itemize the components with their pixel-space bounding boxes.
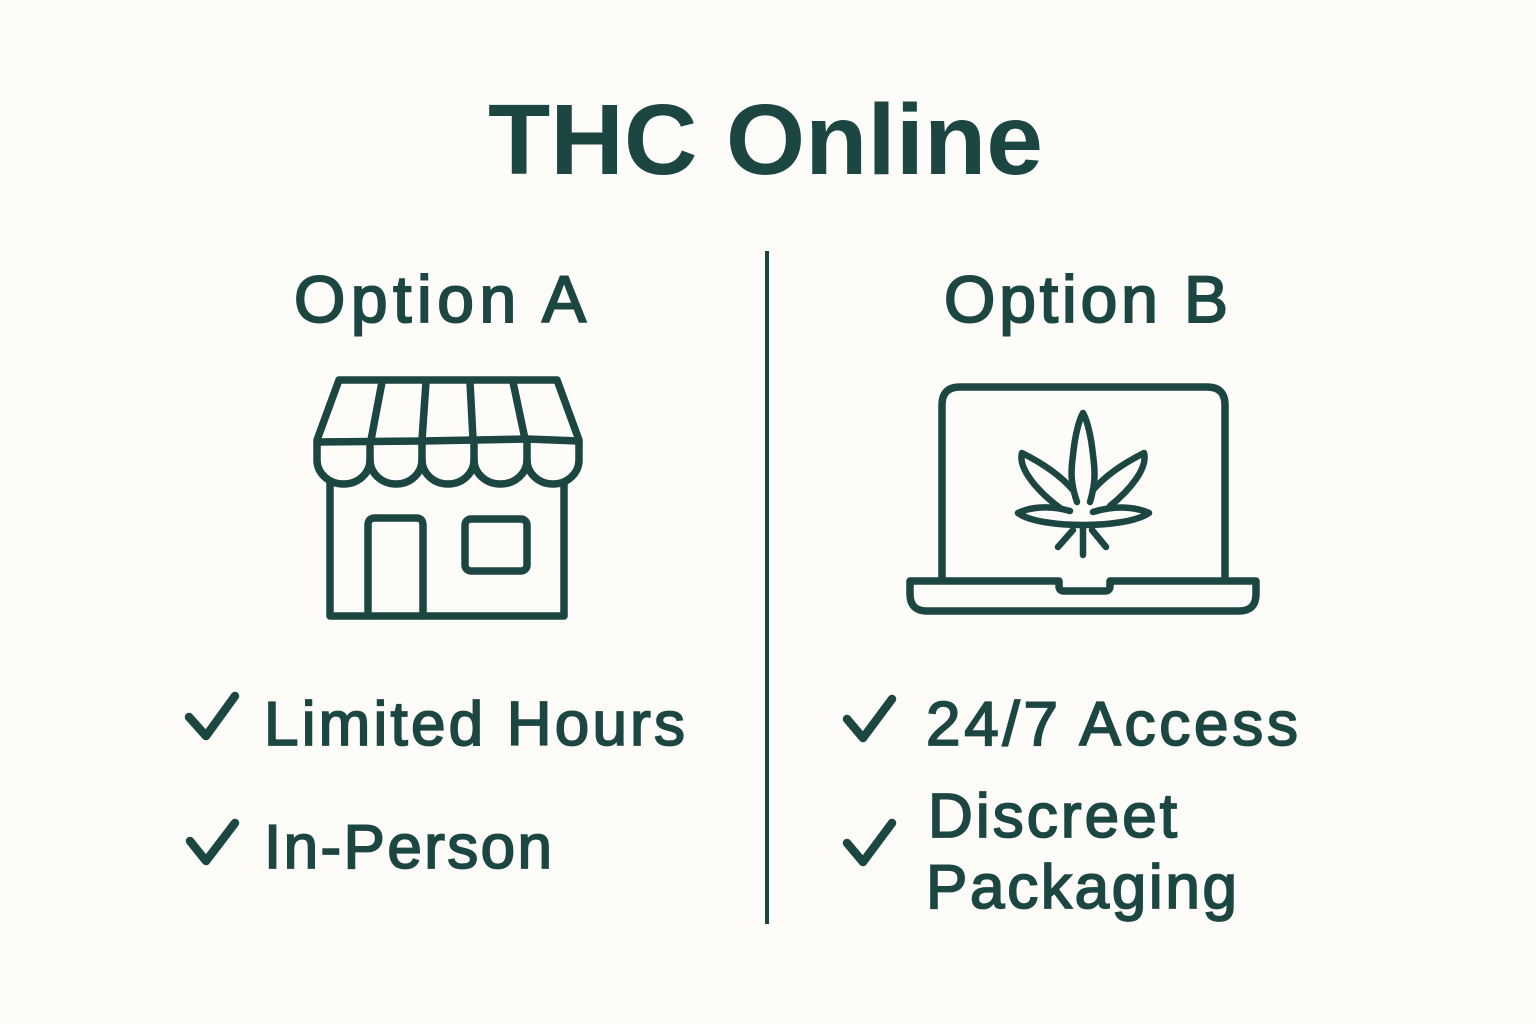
check: discreet packaging <box>847 823 892 862</box>
text: discreet packaging <box>926 782 1237 922</box>
text: discreet packaging: Packaging <box>926 853 1237 922</box>
divider <box>765 251 769 924</box>
heading: option A: Option A <box>294 262 586 336</box>
check: in-person <box>190 823 235 861</box>
heading: option B: Option B <box>944 262 1228 336</box>
panel: option A <box>189 262 685 882</box>
panel: option B <box>847 262 1298 922</box>
text: limited hours: Limited Hours <box>264 690 685 759</box>
icon: laptop with leaf <box>910 387 1256 611</box>
text: 24/7 access: 24/7 Access <box>926 690 1298 759</box>
text: in-person: In-Person <box>264 813 552 882</box>
check: limited hours <box>189 696 235 736</box>
check: 24/7 access <box>847 699 892 738</box>
icon: storefront <box>317 380 579 616</box>
title: THC Online <box>488 84 1043 196</box>
text: discreet packaging: Discreet <box>928 782 1177 851</box>
